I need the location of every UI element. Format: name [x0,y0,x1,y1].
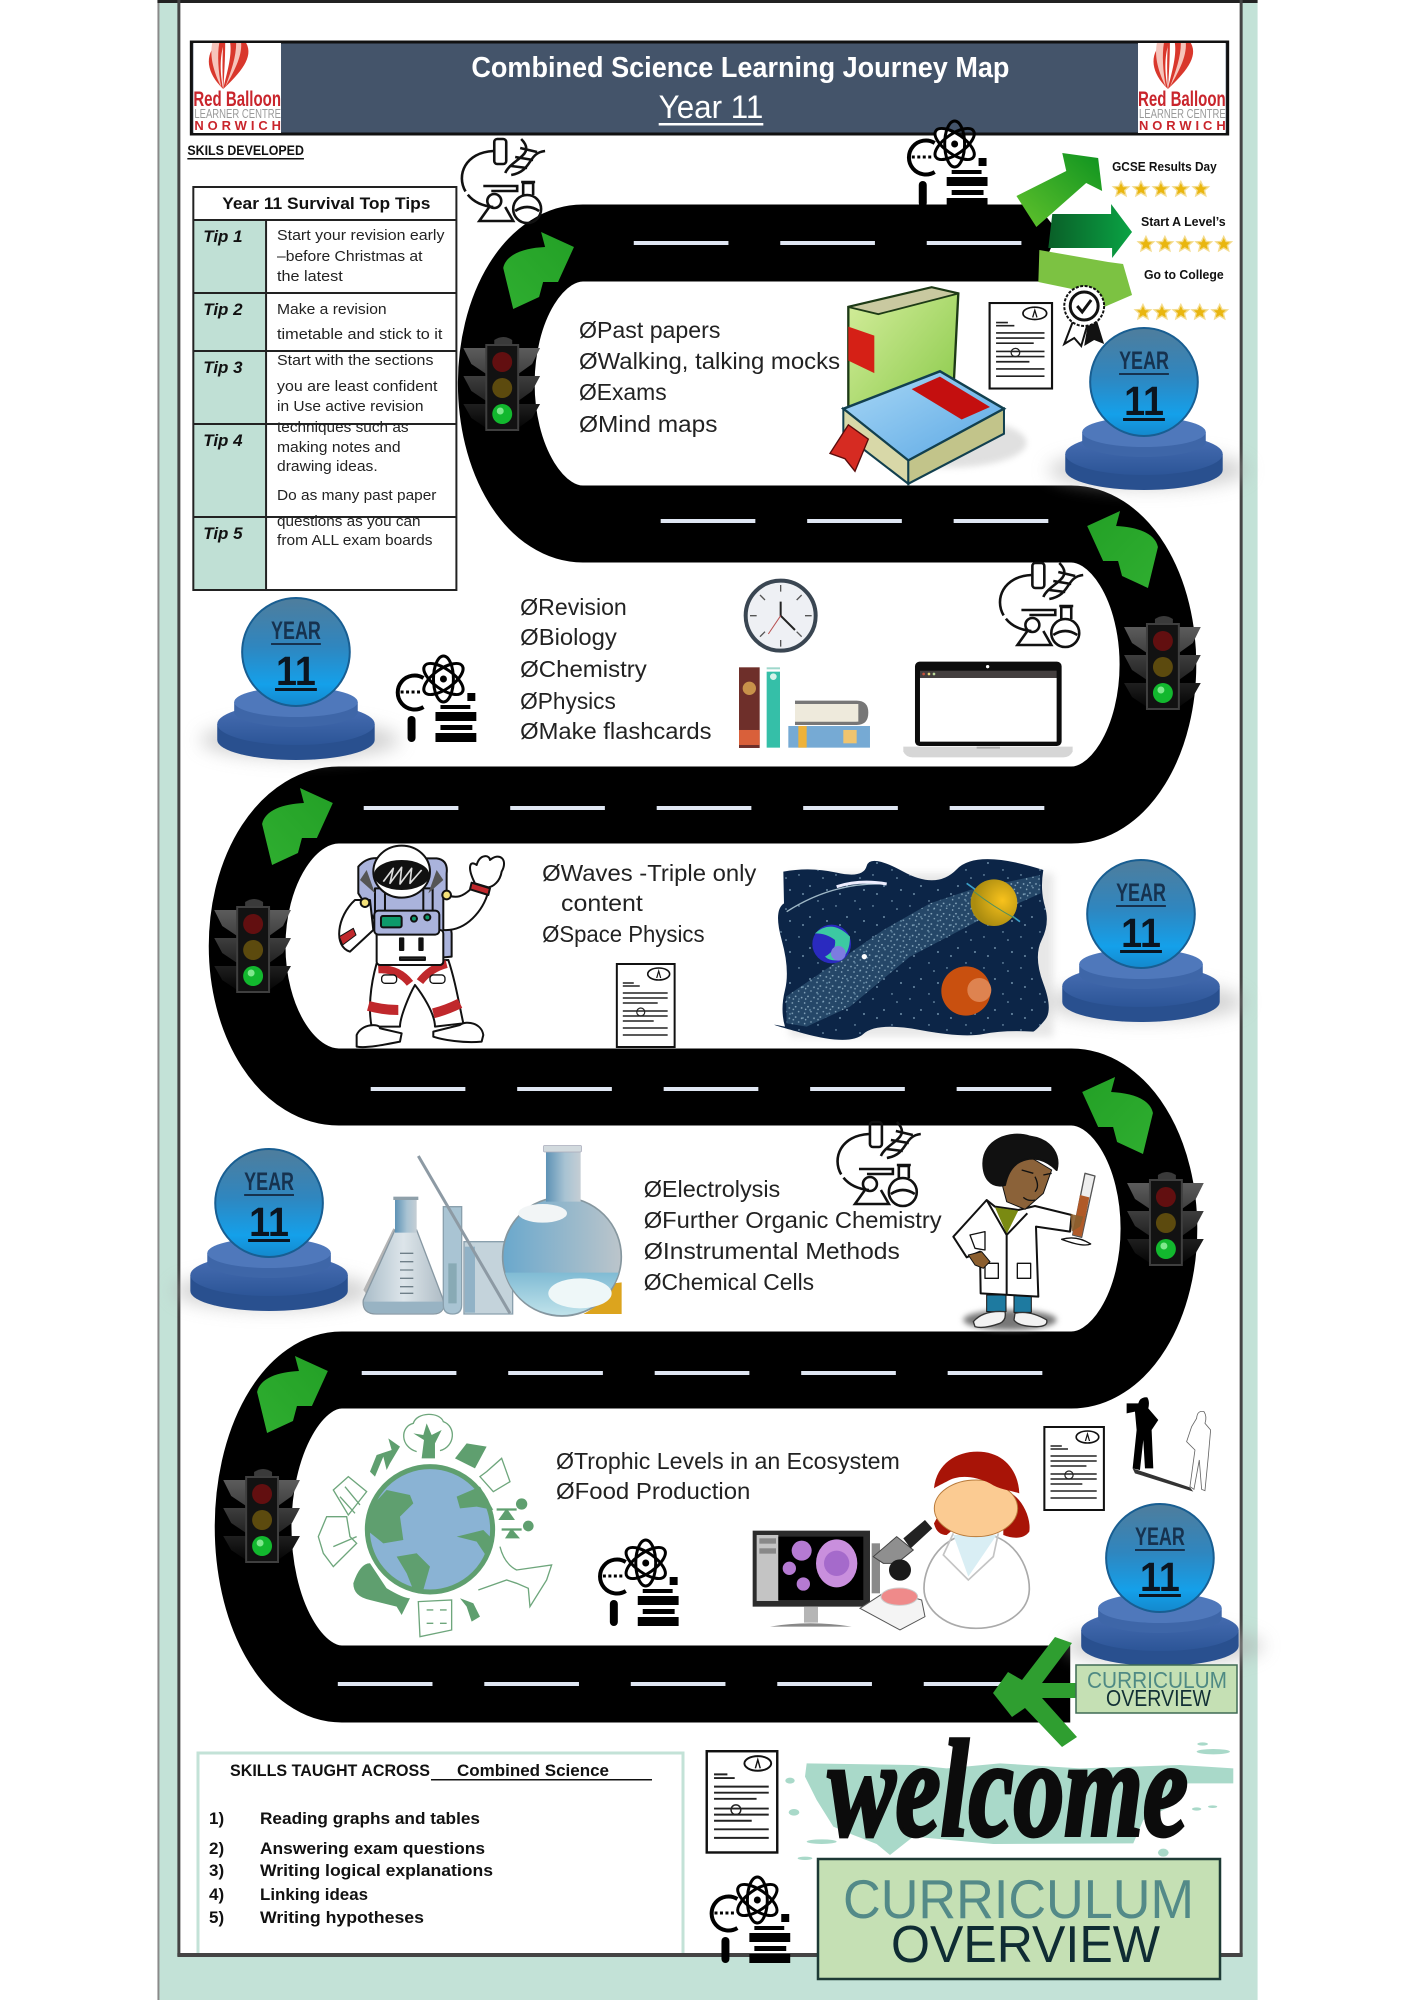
illustration: astronaut [339,846,504,1047]
traffic light 1 [463,337,540,430]
skills list: 3) [209,1861,224,1880]
traffic light 4 [1127,1172,1204,1265]
text block: biology list: ØFood Production [556,1478,750,1504]
text block: physics list [542,860,757,947]
year badge 1: YEAR [1119,347,1169,375]
illustration: lab monitor [753,1531,870,1627]
skills list: 5) [209,1908,224,1927]
year badge 1: 11 [1124,378,1164,424]
year badge 3: 11 [1121,910,1161,956]
left logo: Red Balloon [193,88,281,111]
year badge 2 [200,598,400,760]
skills list: Writing logical explanations [260,1861,493,1880]
skills taught box [198,1753,683,1957]
header banner [191,42,1228,134]
stars row 1 [1113,182,1209,196]
skills heading: Combined Science [457,1761,609,1780]
text block: exams list [579,317,840,437]
text block: revision list [520,594,712,744]
icon: microscope and DNA 3 [838,1122,921,1206]
skills list: Writing hypotheses [260,1908,424,1927]
skills heading [230,1761,652,1780]
traffic light 2 [1124,616,1201,709]
welcome paint splash [785,1742,1233,1860]
tip descriptions: drawing ideas. [277,458,378,475]
tip descriptions: in Use active revision [277,398,424,415]
year badge 3 [1045,860,1245,1022]
tip descriptions [277,227,445,549]
icon: shadow figures [1127,1397,1211,1492]
text block: biology list [556,1448,900,1504]
text block: exams list: ØMind maps [579,411,717,437]
skills heading: SKILLS TAUGHT ACROSS [230,1761,430,1780]
illustration: microscope [860,1520,932,1630]
traffic light 5 [223,1469,300,1562]
year badge 3: YEAR [1116,879,1166,907]
text block: revision list: ØChemistry [520,656,647,682]
text block: chemistry list [644,1176,942,1295]
destination labels [1112,160,1226,282]
illustration: eco globe [318,1414,552,1637]
icon: research atom 3 [600,1540,679,1626]
tip labels [203,227,243,543]
year badge 5: YEAR [1135,1523,1185,1551]
subtitle: Year 11 [659,89,763,125]
tip descriptions: from ALL exam boards [277,532,432,549]
tip descriptions: you are least confident [277,378,438,395]
left logo: LEARNER CENTRE [194,106,281,121]
illustration: wall clock [746,581,816,651]
traffic light 3 [214,899,291,992]
start arrow [993,1637,1077,1747]
tip labels: Tip 5 [203,524,243,543]
tip labels: Tip 2 [203,300,243,319]
stars row 3 [1135,304,1227,319]
curriculum overview panel: OVERVIEW [891,1916,1160,1974]
tips table [193,187,456,590]
destination labels: GCSE Results Day [1112,160,1217,174]
right logo: LEARNER CENTRE [1139,106,1226,121]
tip descriptions: Start your revision early [277,227,445,244]
illustration: laptop [903,662,1073,757]
text block: exams list: ØExams [579,379,667,405]
tip descriptions: making notes and [277,439,401,456]
skills list: Reading graphs and tables [260,1809,480,1828]
tip labels: Tip 3 [203,358,243,377]
right logo [1138,43,1226,133]
text block: chemistry list: ØFurther Organic Chemistry [644,1207,942,1233]
year badge 5: 11 [1140,1554,1180,1600]
year badge 4: 11 [249,1199,289,1245]
winding road [247,204,1159,1686]
page frame [157,0,1258,2000]
illustration: space scene [774,859,1053,1040]
skills list: 2) [209,1839,224,1858]
text block: revision list: ØBiology [520,624,617,650]
icon: award medal [1064,286,1104,346]
exam paper 1 [990,303,1052,389]
text block: revision list: ØMake flashcards [520,718,712,744]
illustration: doctor [924,1452,1030,1628]
text block: physics list: ØSpace Physics [542,921,705,947]
table heading: Year 11 Survival Top Tips [222,194,430,213]
small curriculum overview label: CURRICULUM [1087,1667,1227,1693]
tip descriptions: –before Christmas at [277,248,423,265]
year badge 5 [1064,1504,1264,1666]
skills list: 1) [209,1809,224,1828]
illustration: scientist [953,1135,1095,1330]
right logo: Red Balloon [1138,88,1226,111]
road arrow 1 [503,232,574,309]
icon: microscope and DNA 1 [462,139,545,223]
tip descriptions: Do as many past paper [277,487,436,504]
small curriculum overview label [1076,1665,1237,1713]
exam paper 3 [1044,1427,1104,1510]
destination labels: Go to College [1144,268,1224,282]
text block: physics list: content [561,890,643,916]
year badge 2: YEAR [271,617,321,645]
road arrow 2 [1087,511,1158,588]
icon: research atom 4 [712,1877,790,1963]
year badge 4 [173,1149,373,1311]
skills list [209,1809,493,1927]
text block: chemistry list: ØChemical Cells [644,1269,814,1295]
road arrow 5 [257,1356,328,1433]
curriculum overview panel [818,1859,1220,1979]
road arrow 3 [262,788,333,865]
destination labels: Start A Level’s [1141,215,1226,229]
text block: exams list: ØWalking, talking mocks [579,348,840,374]
skills list: Answering exam questions [260,1839,485,1858]
small curriculum overview label: OVERVIEW [1106,1685,1211,1711]
text block: revision list: ØPhysics [520,688,616,714]
skills developed heading: SKILS DEVELOPED [187,142,304,158]
tip descriptions: techniques such as [277,419,409,436]
text block: chemistry list: ØInstrumental Methods [644,1238,900,1264]
skills list: 4) [209,1885,224,1904]
tip labels: Tip 1 [203,227,243,246]
tip descriptions: the latest [277,268,344,285]
exam paper 4 [707,1751,777,1852]
left logo [193,43,281,133]
year badge 1 [1048,328,1248,490]
icon: research atom 2 [398,656,476,742]
skills list: Linking ideas [260,1885,368,1904]
icon: research atom 1 [909,121,988,207]
illustration: lab glassware [363,1145,622,1316]
right logo: NORWICH [1139,118,1226,133]
tip descriptions: questions as you can [277,513,421,530]
tip descriptions: Start with the sections [277,352,433,369]
text block: revision list: ØRevision [520,594,627,620]
tip descriptions: Make a revision [277,301,387,318]
year badge 4: YEAR [244,1168,294,1196]
year badge 2: 11 [276,648,316,694]
curriculum overview panel: CURRICULUM [843,1868,1194,1930]
tip labels: Tip 4 [203,431,243,450]
welcome lettering: welcome [828,1712,1188,1865]
illustration: textbooks [830,287,1027,484]
text block: exams list: ØPast papers [579,317,720,343]
tip descriptions: timetable and stick to it [277,326,443,343]
icon: microscope and DNA 2 [1000,563,1083,647]
exam paper 2 [617,964,675,1047]
stars row 2 [1138,236,1231,251]
text block: physics list: ØWaves -Triple only [542,860,757,886]
left logo: NORWICH [194,118,281,133]
title: Combined Science Learning Journey Map [471,52,1009,84]
illustration: book stack [739,667,870,748]
text block: biology list: ØTrophic Levels in an Ecosystem [556,1448,900,1474]
road arrow 4 [1082,1077,1153,1154]
text block: chemistry list: ØElectrolysis [644,1176,780,1202]
destination arrows [1016,153,1132,307]
